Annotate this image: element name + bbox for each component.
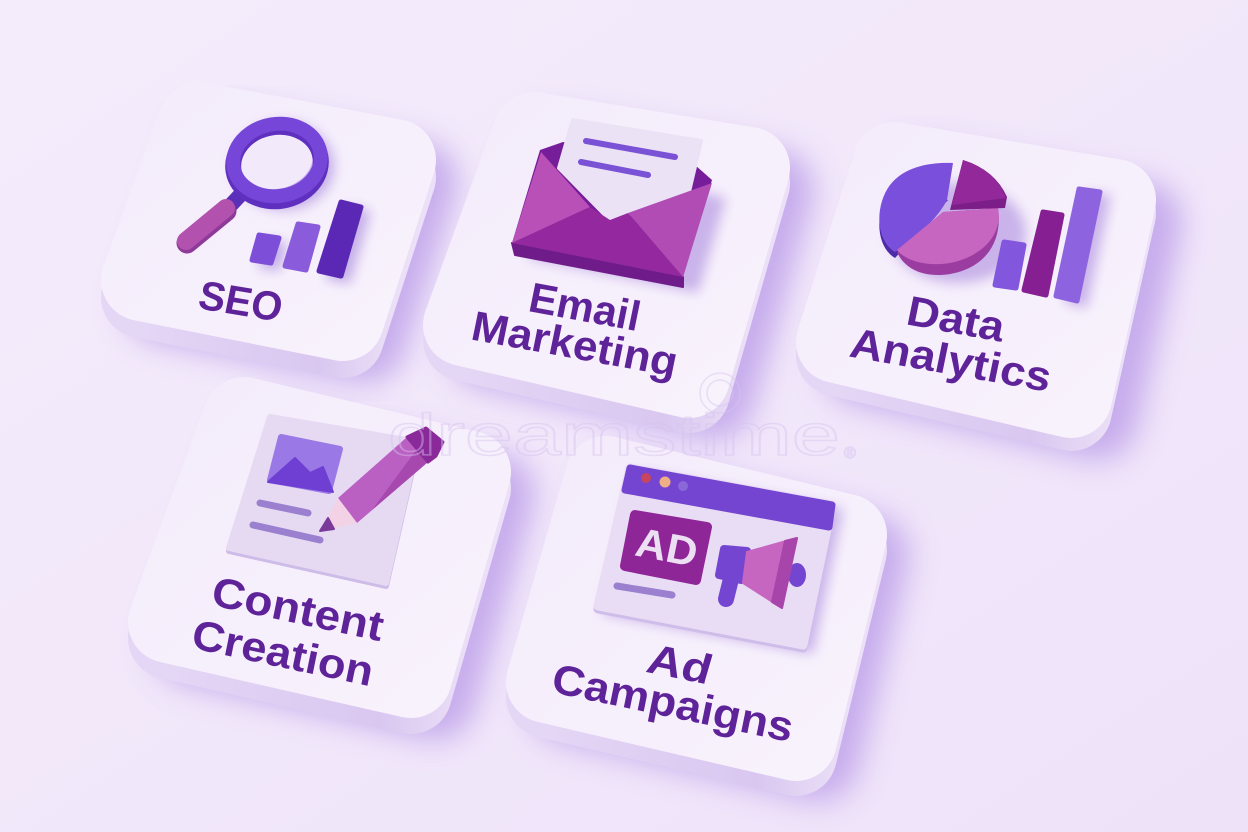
card shadow [863,185,1141,419]
card shadow [569,497,868,760]
panel: SEO [142,117,417,342]
label: Ad Campaigns: Campaigns [548,655,798,751]
panel: Data Analytics [837,160,1141,419]
card shadow [193,440,494,699]
card side [547,492,846,755]
icon: pie chart and bars [879,160,1111,308]
panel: Ad Campaigns [547,468,868,760]
card shadow [164,145,417,342]
label: Content Creation: Creation [188,610,378,695]
label: Content Creation [188,568,388,695]
icon: magnifier and rising bars [186,117,371,284]
label: Data Analytics: Data [903,287,1010,351]
card face [837,163,1115,397]
label: Data Analytics: Analytics [846,319,1056,401]
icon: browser window with AD and megaphone [598,468,843,654]
icon: document with picture and pencil [229,417,443,586]
card side [464,148,749,392]
label: Email Marketing [468,274,682,386]
card side [142,140,395,337]
watermark: ® [844,445,856,462]
card side [837,176,1115,410]
panel: Content Creation [169,417,494,699]
card face [142,123,395,320]
label: Email Marketing: Marketing [468,302,682,386]
panel: Email Marketing [464,120,773,399]
watermark: dreamstime [388,403,840,468]
label: Content Creation: Content [208,568,388,650]
label: Email Marketing: Email [525,274,645,340]
card face [169,418,470,677]
icon: browser window with AD and megaphone: AD [632,519,702,576]
watermark [388,373,856,468]
card side [169,434,470,693]
card shadow [488,155,773,399]
icon: open envelope with letter [512,120,726,293]
card face [464,133,749,377]
label: SEO: SEO [195,272,287,331]
label: Ad Campaigns: Ad [642,635,718,693]
card face [547,477,846,740]
label: Data Analytics [846,287,1056,401]
